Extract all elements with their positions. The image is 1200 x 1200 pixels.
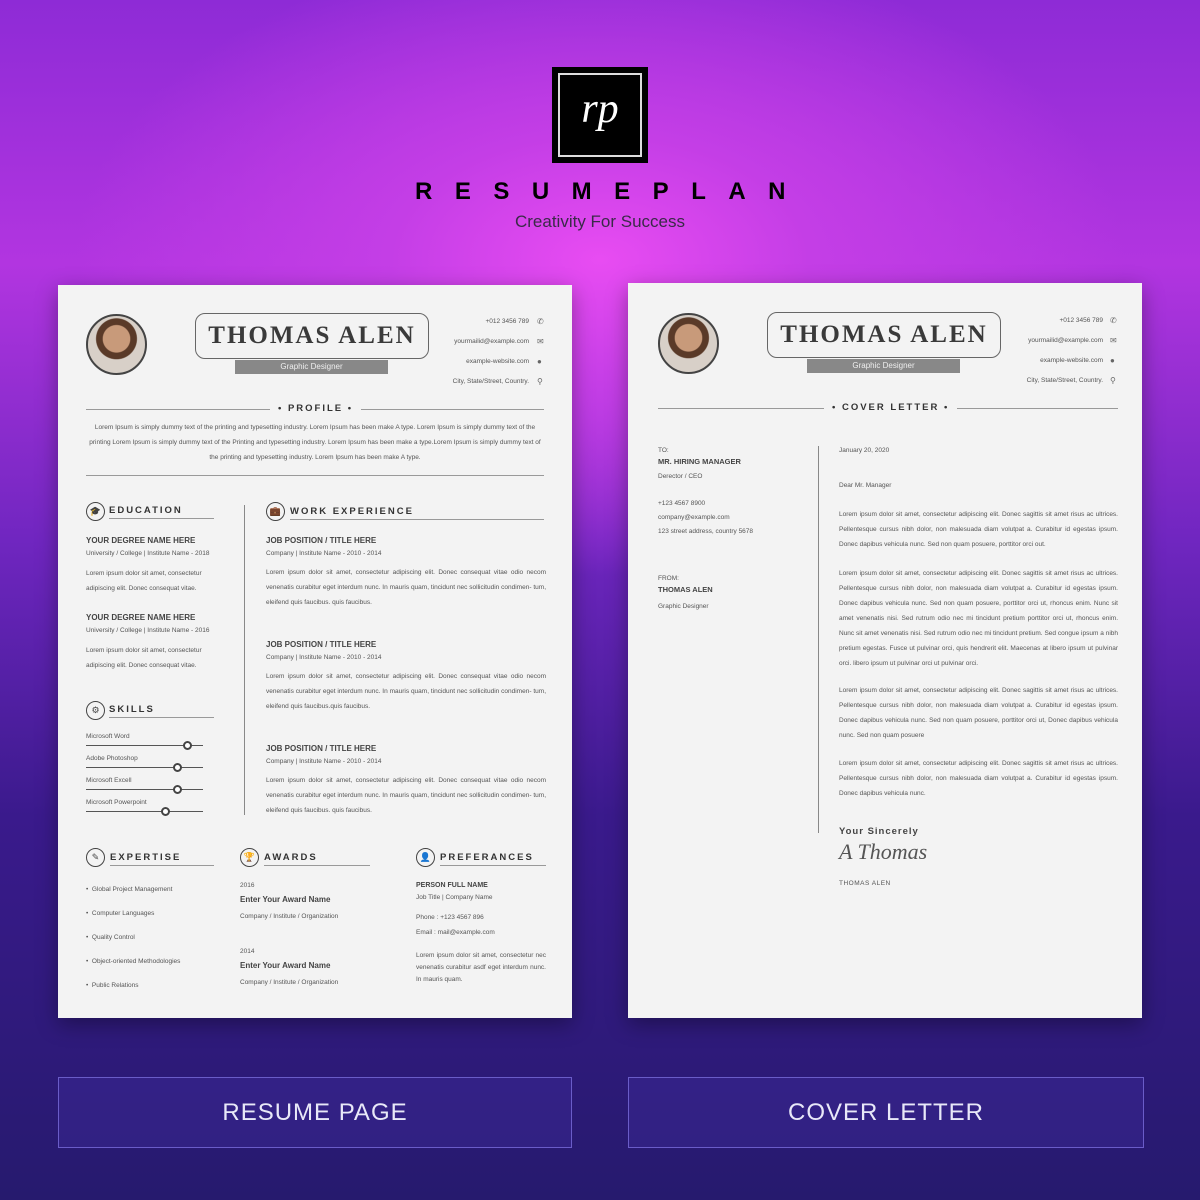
contacts: +012 3456 789 (1059, 317, 1103, 324)
expertise (86, 848, 214, 989)
panel: cover letter page: ✉ (1110, 336, 1117, 345)
brand name: RESUMEPLAN (415, 178, 808, 205)
skills: Microsoft Word (86, 733, 130, 740)
skills: SKILLS (109, 704, 155, 715)
panel: resume page: ✉ (537, 337, 544, 346)
expertise: EXPERTISE (110, 852, 181, 863)
recipient: FROM: (658, 575, 679, 582)
preferences: Lorem ipsum dolor sit amet, consectetur nec venenatis curabitur asdf eget interdum nunc. In mauris quam. (416, 952, 546, 983)
awards: Enter Your Award Name (240, 961, 330, 970)
education: Lorem ipsum dolor sit amet, consectetur adipiscing elit. Donec consequat vitae. (86, 570, 202, 592)
panel: cover letter page (628, 283, 1142, 1018)
education: University / College | Institute Name - 2018 (86, 550, 209, 557)
contacts: City, State/Street, Country. (453, 378, 529, 385)
panel: cover letter page: ● (1110, 356, 1115, 365)
preferences: PERSON FULL NAME (416, 882, 488, 889)
work experience: Company | Institute Name - 2010 - 2014 (266, 654, 382, 661)
panel: cover letter page: Graphic Designer (852, 361, 915, 370)
panel: resume page: • PROFILE • (278, 403, 353, 414)
education: Lorem ipsum dolor sit amet, consectetur adipiscing elit. Donec consequat vitae. (86, 647, 202, 669)
education: EDUCATION (109, 505, 183, 516)
button: cover letter (628, 1077, 1144, 1148)
expertise: • Public Relations (86, 982, 138, 989)
logo (552, 67, 648, 163)
button: resume page (58, 1077, 572, 1148)
expertise: • Object-oriented Methodologies (86, 958, 180, 965)
contacts: example-website.com (466, 358, 529, 365)
contacts: yourmailid@example.com (454, 338, 529, 345)
preferences: Job Title | Company Name (416, 894, 492, 901)
photo (86, 314, 147, 375)
contacts: +012 3456 789 (485, 318, 529, 325)
expertise: • Global Project Management (86, 886, 172, 893)
recipient: Graphic Designer (658, 603, 709, 610)
button: cover letter: COVER LETTER (788, 1099, 984, 1126)
preferences: PREFERANCES (440, 852, 534, 863)
education (86, 502, 214, 669)
work experience: Lorem ipsum dolor sit amet, consectetur adipiscing elit. Donec consequat vitae odio necom venenatis curabitur eget interdum nunc. In mauris quam, tincidunt nec sollicitudin condimen- tum, eleifend quis faucibus. quis faucibus. (266, 777, 546, 814)
skills: Adobe Photoshop (86, 755, 138, 762)
skills (86, 701, 214, 816)
recipient (658, 447, 753, 610)
awards: 2016 (240, 882, 254, 889)
photo (658, 313, 719, 374)
awards: 2014 (240, 948, 254, 955)
letter body: Dear Mr. Manager (839, 482, 891, 489)
panel: cover letter page: • COVER LETTER • (832, 402, 949, 413)
profile heading (86, 409, 544, 410)
work experience: Lorem ipsum dolor sit amet, consectetur adipiscing elit. Donec consequat vitae odio necom venenatis curabitur eget interdum nunc. In mauris quam, tincidunt nec sollicitudin condimen- tum, eleifend quis faucibus.quis faucibus. (266, 673, 546, 710)
contacts: yourmailid@example.com (1028, 337, 1103, 344)
work experience: 💼 (270, 506, 281, 516)
work experience: Lorem ipsum dolor sit amet, consectetur adipiscing elit. Donec consequat vitae odio necom venenatis curabitur eget interdum nunc. In mauris quam, tincidunt nec sollicitudin condimen- tum, eleifend quis faucibus. quis faucibus. (266, 569, 546, 606)
education: 🎓 (90, 506, 101, 516)
name box (767, 312, 1001, 358)
recipient: company@example.com (658, 514, 730, 521)
work experience: Company | Institute Name - 2010 - 2014 (266, 550, 382, 557)
awards: Company / Institute / Organization (240, 913, 338, 920)
name box: THOMAS ALEN (208, 322, 416, 349)
work experience: JOB POSITION / TITLE HERE (266, 744, 376, 753)
name box: THOMAS ALEN (780, 321, 988, 348)
letter body (838, 447, 1118, 887)
letter body: January 20, 2020 (839, 447, 889, 454)
work experience: WORK EXPERIENCE (290, 506, 414, 517)
letter body: Your Sincerely (839, 826, 919, 837)
preferences: Phone : +123 4567 896 (416, 914, 484, 921)
awards: 🏆 (244, 852, 255, 862)
contacts: City, State/Street, Country. (1027, 377, 1103, 384)
awards: Company / Institute / Organization (240, 979, 338, 986)
education: University / College | Institute Name - 2016 (86, 627, 209, 634)
panel: resume page: ⚲ (537, 377, 543, 386)
education: YOUR DEGREE NAME HERE (86, 536, 195, 545)
recipient: THOMAS ALEN (658, 585, 713, 594)
skills: ⚙ (91, 705, 100, 715)
panel: resume page (58, 285, 572, 1018)
work experience: JOB POSITION / TITLE HERE (266, 640, 376, 649)
cover letter heading (658, 408, 1118, 409)
recipient: Derector / CEO (658, 473, 702, 480)
recipient: +123 4567 8900 (658, 500, 705, 507)
name box (195, 313, 429, 359)
expertise: • Computer Languages (86, 910, 154, 917)
panel: resume page: ● (537, 357, 542, 366)
recipient: TO: (658, 447, 669, 454)
preferences (416, 848, 546, 983)
expertise: • Quality Control (86, 934, 135, 941)
panel: resume page: Graphic Designer (280, 362, 343, 371)
contacts: example-website.com (1040, 357, 1103, 364)
contacts (452, 318, 529, 385)
button: resume page: RESUME PAGE (222, 1099, 408, 1126)
letter body: Lorem ipsum dolor sit amet, consectetur adipiscing elit. Donec sagittis sit amet risus ac ultrices. Pellentesque cursus nibh dolor, non malesuada diam volutpat a. Curabitur id egestas ipsum. Donec dapibus vehicula nunc. Sed non quam posuere, porttitor orci ut, Donec dapibus vehicula nunc. Sed non quam posuere (839, 687, 1118, 739)
preferences: Email : mail@example.com (416, 929, 495, 936)
letter body: Lorem ipsum dolor sit amet, consectetur adipiscing elit. Donec sagittis sit amet risus ac ultrices. Pellentesque cursus nibh dolor, non malesuada diam volutpat a. Curabitur id egestas ipsum. Donec dapibus vehicula nunc. Sed non quam posuere, porttitor orci ut, rhoncus enim. Nunc sit amet venenatis nisi. Sed rutrum odio nec mi tincidunt pretium porttitor orci ut, rhoncus enim. Nunc sit amet venenatis nisi. Sed rutrum odio nec mi tincidunt pretium. Sed congue ipsum a nibh pretium egestas. Fusce ut pulvinar orci, quis hendrerit elit. Maecenas at libero ipsum ut pulvinar orci. libero ipsum ut pulvinar orci ut pulvinar orci. (839, 570, 1118, 667)
expertise: ✎ (92, 852, 99, 862)
panel: cover letter page: ✆ (1110, 316, 1117, 325)
work experience: Company | Institute Name - 2010 - 2014 (266, 758, 382, 765)
letter body: A Thomas (839, 839, 927, 864)
preferences: 👤 (420, 852, 431, 862)
recipient: 123 street address, country 5678 (658, 528, 753, 535)
panel: resume page: Lorem Ipsum is simply dummy text of the printing and typesetting industry. Lorem Ipsum has been make A type. Lorem Ipsum is simply dummy text of the printing Lorem Ipsum is simply dummy text of the Printing and typesetting industry. Lorem Ipsum has been make a type.Lorem Ipsum is simply dummy text of the printing and typesetting industry. Lorem Ipsum has been make A type. (89, 424, 541, 461)
education: YOUR DEGREE NAME HERE (86, 613, 195, 622)
panel: cover letter page: ⚲ (1110, 376, 1116, 385)
recipient: MR. HIRING MANAGER (658, 457, 741, 466)
work experience (266, 502, 546, 814)
letter body: Lorem ipsum dolor sit amet, consectetur adipiscing elit. Donec sagittis sit amet risus ac ultrices. Pellentesque cursus nibh dolor, non malesuada diam volutpat a. Curabitur id egestas ipsum. Donec dapibus vehicula nunc. Sed non quam posuere, porttitor orci out. (839, 511, 1118, 548)
panel: cover letter page: THOMAS ALEN (839, 880, 891, 887)
awards: Enter Your Award Name (240, 895, 330, 904)
skills: Microsoft Powerpoint (86, 799, 147, 806)
letter body: Lorem ipsum dolor sit amet, consectetur adipiscing elit. Donec sagittis sit amet risus ac ultrices. Pellentesque cursus nibh dolor, non malesuada diam volutpat a. Curabitur id egestas ipsum. Donec dapibus vehicula nunc. (839, 760, 1118, 797)
awards: AWARDS (264, 852, 318, 863)
skills: Microsoft Excell (86, 777, 132, 784)
tagline: Creativity For Success (515, 212, 685, 231)
contacts (1026, 317, 1103, 384)
awards (240, 848, 370, 986)
work experience: JOB POSITION / TITLE HERE (266, 536, 376, 545)
logo: rp (581, 86, 619, 132)
panel: resume page: ✆ (537, 317, 544, 326)
